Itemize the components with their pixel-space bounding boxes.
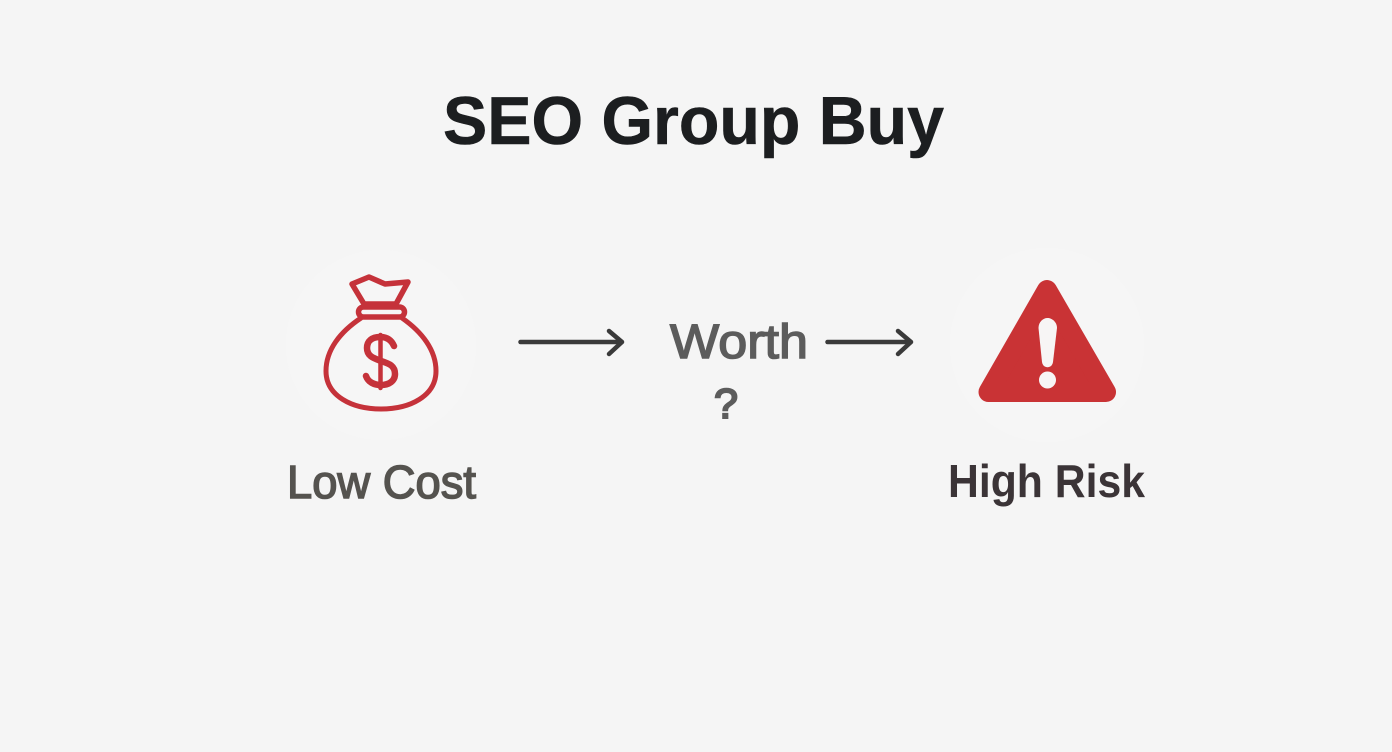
icon: money bag xyxy=(326,277,436,409)
question: worth: ? xyxy=(714,380,738,427)
question: worth xyxy=(670,316,808,427)
title: SEO Group Buy xyxy=(443,83,944,159)
arrow: worth to risk xyxy=(828,331,911,354)
question: worth: Worth xyxy=(670,316,808,369)
label: low cost: Low Cost xyxy=(287,456,476,508)
label: high risk: High Risk xyxy=(948,455,1145,507)
arrow: cost to worth xyxy=(520,331,622,354)
icon: warning triangle xyxy=(988,290,1106,392)
